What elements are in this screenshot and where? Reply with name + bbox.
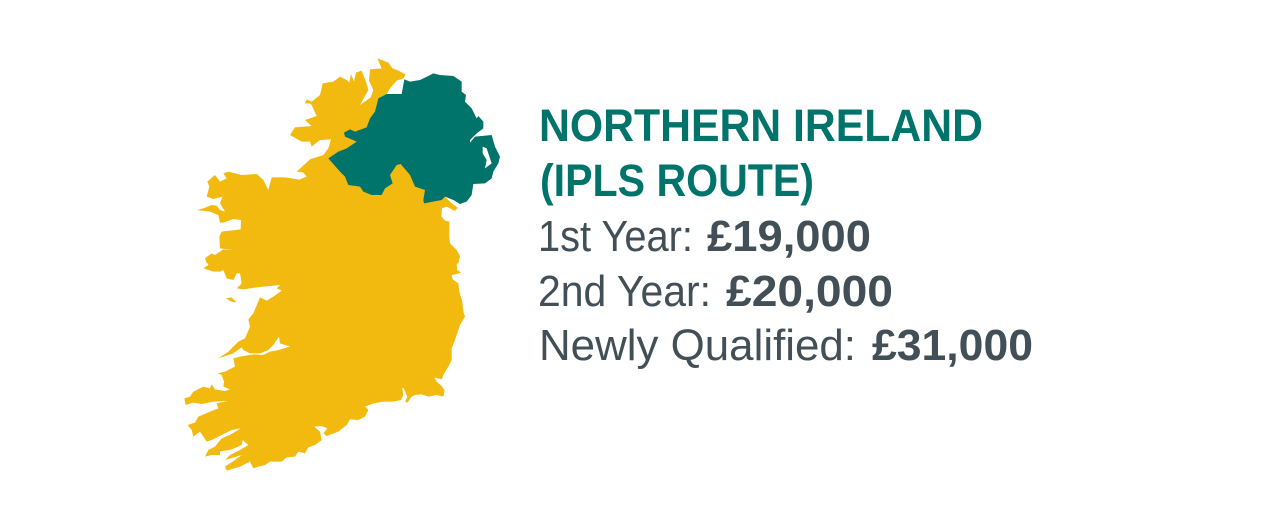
salary: newly qualified: Newly Qualified:: [539, 321, 856, 370]
salary: newly qualified: £31,000: [872, 321, 1033, 370]
salary: 2nd year: [538, 267, 893, 316]
map of Ireland: [184, 58, 500, 471]
salary: newly qualified: [539, 321, 1033, 370]
salary: 1st year: 1st Year:: [538, 212, 693, 261]
salary: 2nd year: 2nd Year:: [538, 267, 711, 316]
heading: [539, 100, 983, 206]
map region: Northern Ireland: [328, 73, 500, 204]
heading line 1: NORTHERN IRELAND: [539, 100, 983, 151]
map region: Republic of Ireland, north part: [197, 58, 460, 263]
salary list: [538, 212, 1033, 370]
heading line 2: (IPLS ROUTE): [540, 155, 814, 206]
salary: 1st year: £19,000: [707, 212, 871, 261]
salary: 2nd year: £20,000: [726, 267, 893, 316]
map region: Republic of Ireland, south part: [184, 257, 465, 471]
salary: 1st year: [538, 212, 871, 261]
